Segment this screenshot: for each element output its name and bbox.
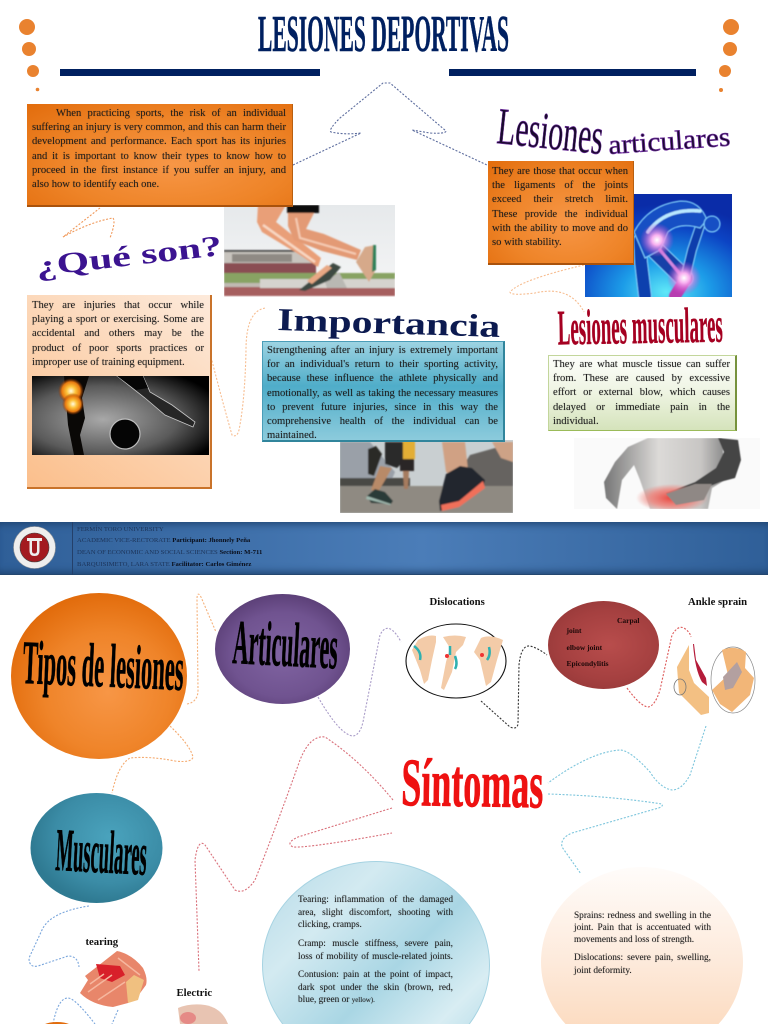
decorative dots left	[19, 19, 40, 92]
heading: Lesiones articulares: articulares	[607, 122, 731, 160]
text block: joint symptoms: joint. Pain that is accentuated with	[574, 922, 711, 932]
text block: what are they: improper use of training equipment.	[32, 357, 185, 368]
list: joint injuries: joint	[566, 626, 582, 635]
label: Electric: Electric	[176, 987, 212, 999]
text block: articular injuries: These provide the individual	[492, 209, 628, 220]
list: joint injuries: Epicondylitis	[566, 659, 609, 668]
text block: muscular injuries	[552, 359, 730, 427]
text block: joint symptoms	[574, 910, 711, 976]
text block: intro: development and performance. Each sport has its injuries	[32, 136, 286, 147]
divider	[72, 522, 73, 575]
text block: muscular symptoms: dark spot under the skin (brown, red,	[298, 982, 453, 992]
text block: importance: Strengthening after an injury is extremely important	[267, 345, 498, 356]
text block: muscular injuries: individual.	[553, 416, 599, 427]
connector: peach under articular box	[510, 265, 584, 312]
image: sprinter on starting blocks	[224, 205, 395, 297]
image: runners on track	[340, 440, 513, 513]
text block: importance	[267, 345, 498, 441]
text block: credits: BARQUISIMETO, LARA STATE Facilitator: Carlos Giménez	[77, 561, 251, 568]
connector: black dislocations to red ellipse	[481, 646, 547, 728]
connector: orange to articulares	[187, 594, 216, 704]
text block: muscular injuries: effort or external blow, which causes	[553, 387, 730, 398]
text block: credits	[77, 526, 262, 568]
text block: muscular symptoms: blue, green or yellow).	[298, 994, 375, 1004]
text block: joint symptoms: Sprains: redness and swelling in the	[574, 910, 711, 920]
text block: credits: ACADEMIC VICE-RECTORATE Participant: Jhonnely Peña	[77, 537, 250, 544]
text block: articular injuries: so with stability.	[492, 237, 562, 248]
image: blue body with glowing joints	[585, 194, 732, 297]
text block: joint symptoms: Dislocations: severe pain, swelling,	[574, 953, 711, 963]
text block: muscular injuries: delayed or immediate pain in the	[553, 402, 730, 413]
image: ankle sprain	[674, 644, 756, 715]
image: glowing knee	[32, 376, 209, 455]
text block: intro: also how to identify each one.	[32, 179, 159, 190]
connector: red symptoms to blue circle	[290, 808, 392, 847]
list: joint injuries: Carpal	[617, 616, 640, 625]
text block: joint symptoms: joint deformity.	[574, 966, 632, 976]
text block: muscular symptoms	[298, 894, 453, 1004]
text block: articular injuries: exceed their stretch limit.	[492, 194, 628, 205]
text block: joint symptoms: movements and loss of strength.	[574, 934, 694, 944]
text block: muscular symptoms: clicking, cramps.	[298, 920, 362, 930]
panel: what are they	[27, 295, 212, 489]
text block: muscular symptoms: Tearing: inflammation of the damaged	[298, 894, 453, 904]
text block: muscular symptoms: Cramp: muscle stiffness, severe pain,	[298, 938, 453, 948]
circle: muscular symptoms	[262, 861, 490, 1024]
text block: importance: emotionally, as well as taking the necessary measures	[267, 388, 498, 399]
text block: intro: proceed in the first instance if you suffer an injury, and	[32, 165, 286, 176]
text block: articular injuries: They are those that occur when	[492, 166, 628, 177]
orange circle peeking at bottom	[45, 1022, 69, 1024]
text block: importance: comprehensive health of the individual can be	[267, 416, 498, 427]
connector: orange under intro box	[63, 208, 114, 238]
connector: orange to musculares	[112, 726, 193, 793]
text block: what are they	[32, 300, 204, 368]
text block: muscular injuries: They are what muscle tissue can suffer	[553, 359, 730, 370]
banner: university credits	[0, 522, 768, 575]
heading: Importancia: Importancia	[277, 301, 501, 342]
connector: blue musculares to tearing	[29, 906, 89, 967]
connector: red ellipse to ankle sprain	[627, 627, 691, 707]
text block: importance: maintained.	[267, 430, 317, 441]
text block: muscular symptoms: area, slight discomfort, shooting with	[298, 908, 453, 918]
connector: red symptoms to musculares side	[195, 737, 393, 971]
text block: what are they: They are injuries that occur while	[32, 300, 204, 311]
text block: articular injuries	[492, 166, 628, 248]
connector: light blue symptoms to ankle	[548, 726, 706, 790]
image: back pain torso	[603, 438, 742, 509]
panel: articular injuries text	[488, 161, 634, 265]
heading: Que son: ¿Qué son?	[34, 232, 224, 283]
text block: what are they: playing a sport or exercising. Some are	[32, 314, 204, 325]
text block: intro: When practicing sports, the risk of an individual	[56, 108, 286, 119]
icon: university seal	[13, 526, 56, 569]
connector: peach between definition and importance	[211, 308, 266, 436]
text block: muscular injuries: from. These are caused by excessive	[553, 373, 730, 384]
text block: intro: and it is important to know their types to know how to	[32, 151, 286, 162]
decorative dots right	[719, 19, 739, 92]
connector: blue at page bottom	[53, 998, 118, 1024]
text block: credits: DEAN OF ECONOMIC AND SOCIAL SCIENCES Section: M-711	[77, 549, 262, 556]
label: tearing: tearing	[86, 936, 118, 948]
text block: importance: because these influence the athlete physically and	[267, 373, 498, 384]
text block: credits: FERMÍN TORO UNIVERSITY	[77, 526, 164, 532]
text block: what are they: product of poor sports practices or	[32, 343, 204, 354]
right title underline bar	[449, 69, 696, 76]
list: joint injuries	[566, 616, 640, 668]
circle: Tipos de lesiones	[11, 593, 187, 759]
label: Ankle sprain: Ankle sprain	[688, 596, 747, 608]
connector: light blue symptoms to peach circle	[548, 794, 662, 874]
text block: articular injuries: with the ability to move and do	[492, 223, 628, 234]
text block: muscular symptoms: Contusion: pain at the point of impact,	[298, 970, 453, 980]
circle: joint symptoms	[541, 867, 743, 1024]
left title underline bar	[60, 69, 320, 76]
text block: importance: for an individual's return to their sporting activity,	[267, 359, 498, 370]
connector: navy arrow between intro and articular injuries	[293, 83, 487, 165]
circle: Articulares	[215, 594, 350, 704]
label: Dislocations: Dislocations	[430, 596, 485, 608]
image: torn muscle	[80, 951, 147, 1007]
panel: intro text	[27, 104, 293, 207]
list: joint injuries: elbow joint	[566, 643, 602, 652]
text block: articular injuries: the ligaments of the joints	[492, 180, 628, 191]
text block: intro	[32, 108, 286, 190]
circle: Musculares	[30, 793, 162, 903]
text block: intro: suffering an injury is very common, and this can harm their	[32, 122, 286, 133]
text block: importance: to prevent future injuries, since in this way the	[267, 402, 498, 413]
text block: muscular symptoms: loss of mobility of muscle-related joints.	[298, 952, 453, 962]
image: shoulder dislocations	[405, 624, 507, 698]
text block: what are they: accidental and others may be the	[32, 328, 204, 339]
panel: importance text	[262, 341, 505, 442]
connector: purple from articulares	[318, 628, 401, 736]
circle: red joints ellipse	[548, 601, 658, 689]
image: electric pain hand	[178, 1004, 228, 1024]
panel: muscular injuries text	[548, 355, 737, 431]
